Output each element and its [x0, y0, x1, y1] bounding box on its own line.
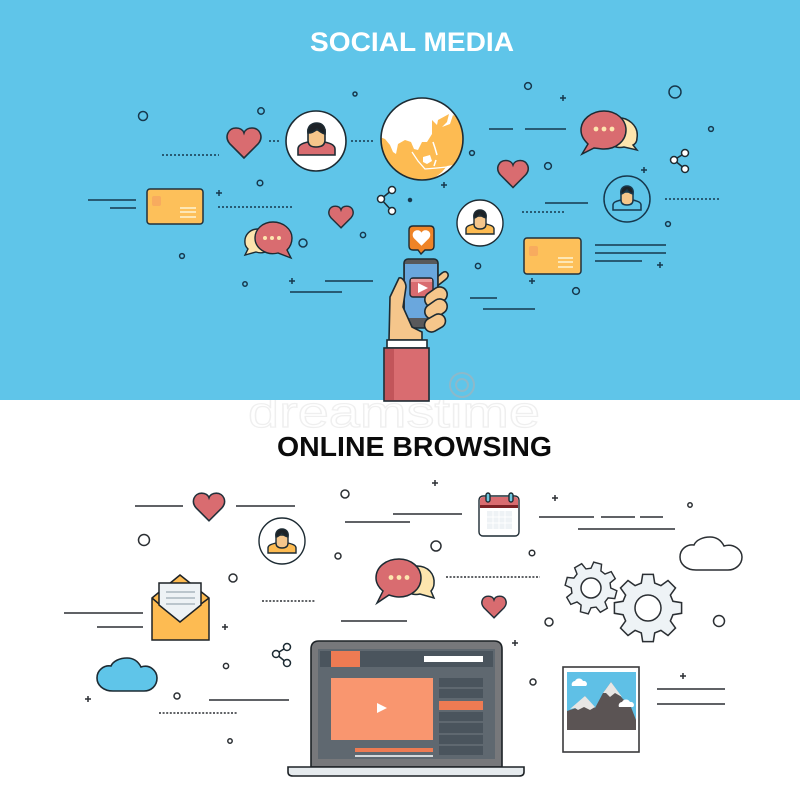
icon: email card right	[524, 238, 581, 274]
icon: share lower	[272, 644, 290, 666]
progress bar	[355, 748, 433, 757]
icon: white cloud	[680, 537, 742, 570]
icon: open envelope	[152, 575, 209, 640]
icon: share top right	[670, 150, 688, 172]
browser top bar	[320, 651, 493, 667]
icon: large gear	[614, 574, 682, 642]
icon: heart small lower	[482, 596, 506, 618]
icon: blue cloud	[97, 658, 157, 691]
decorative lines and dots: online browsing	[64, 480, 725, 743]
sidebar list	[439, 678, 483, 755]
icon: share top centre	[378, 186, 396, 214]
icon: heart large	[227, 128, 261, 158]
watermark	[250, 372, 538, 428]
icon: user avatar outline	[604, 176, 650, 222]
icon: user avatar yellow	[457, 200, 503, 246]
fingers	[422, 284, 450, 310]
icon: chat bubbles left	[245, 222, 292, 258]
phone	[404, 259, 438, 328]
icon: calendar	[479, 493, 519, 536]
watermark: dreamstime	[248, 388, 540, 437]
title: online browsing: ONLINE BROWSING	[277, 431, 552, 462]
icon: photo with mountains	[563, 667, 639, 752]
icon: heart small	[329, 206, 353, 228]
panel: social media background	[0, 0, 800, 400]
sleeve	[384, 348, 429, 401]
icon: chat bubbles top right	[581, 111, 637, 154]
logo block	[331, 651, 360, 667]
icon: heart right	[498, 160, 528, 188]
icon: email card left	[147, 189, 203, 224]
cuff	[387, 340, 427, 348]
icon: user avatar	[259, 518, 305, 564]
title: social media: SOCIAL MEDIA	[310, 27, 514, 57]
decorative lines and dots: social media	[88, 83, 720, 309]
video panel	[331, 678, 433, 740]
icon: user avatar red	[286, 111, 346, 171]
icon: heart top left	[193, 493, 225, 521]
palm and thumb	[389, 278, 422, 340]
icon: chat bubbles lower	[376, 559, 434, 603]
laptop base	[288, 767, 524, 776]
icon: globe	[380, 97, 464, 181]
search box	[424, 656, 483, 662]
index finger behind phone	[436, 272, 448, 287]
icon: small gear	[560, 557, 622, 619]
illustration: hand holding phone	[384, 259, 450, 401]
illustration: laptop	[288, 641, 524, 776]
icon: like badge	[409, 226, 434, 254]
